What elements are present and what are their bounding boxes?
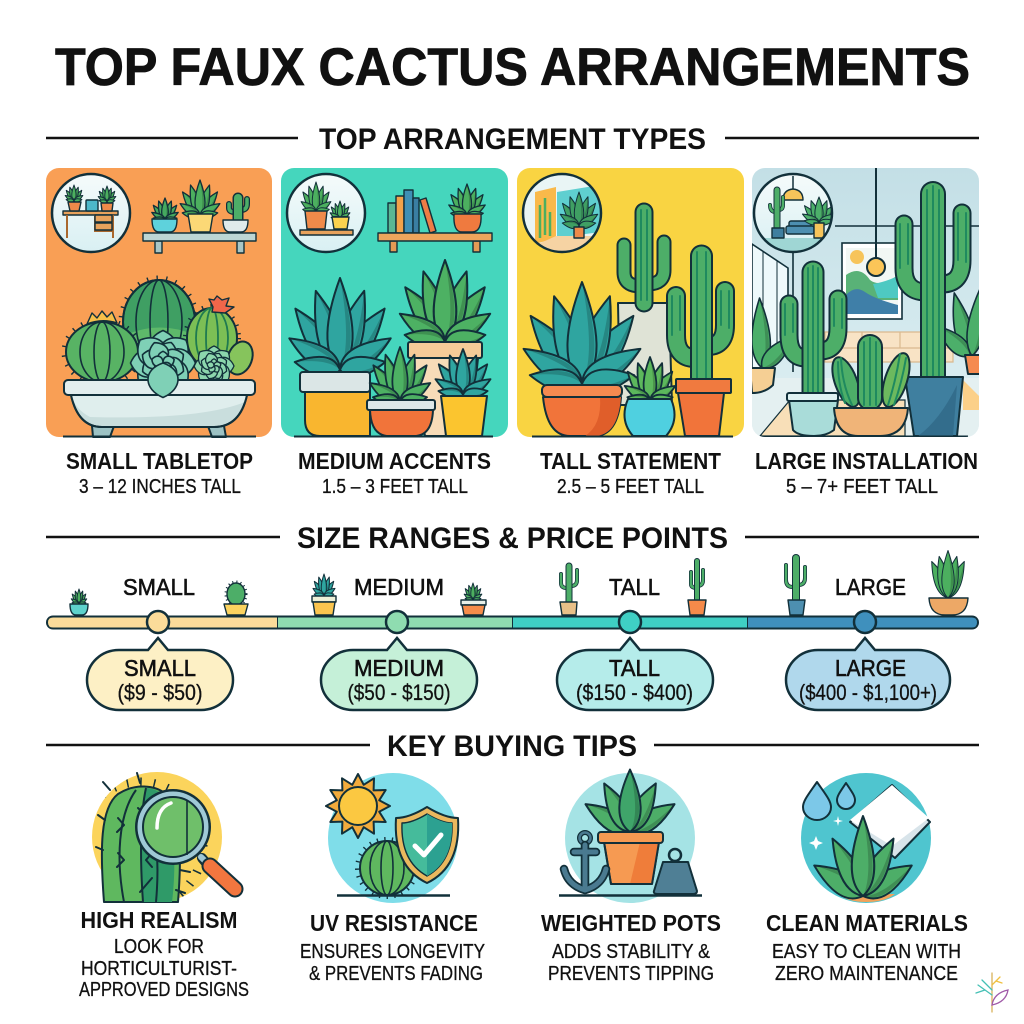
right cactus with terracotta pot	[672, 252, 731, 436]
text: clean materials: ZERO MAINTENANCE	[775, 963, 958, 985]
panel: medium accents	[281, 168, 508, 437]
callout: large price: ($400 - $1,100+)	[799, 680, 937, 705]
captions: arrangement types: LARGE INSTALLATION	[755, 448, 978, 474]
left tall cactus with pale pot	[785, 266, 842, 436]
title: TOP FAUX CACTUS ARRANGEMENTS	[55, 38, 970, 97]
timeline markers	[147, 611, 876, 633]
panel: small tabletop	[46, 168, 272, 437]
callout: tall price: ($150 - $400)	[576, 680, 693, 705]
text: weighted pots: PREVENTS TIPPING	[548, 963, 714, 985]
callout: small price: SMALL	[124, 655, 196, 681]
text: uv resistance: ENSURES LONGEVITY	[300, 941, 485, 963]
inset: living room scene	[754, 174, 837, 258]
tall tan pot and green agave	[395, 260, 495, 436]
inset: desk scene	[52, 174, 130, 252]
icon: water drops, cloth and plant	[801, 773, 931, 905]
small plant in blue pot	[622, 357, 678, 436]
inset: shelf plants	[287, 174, 365, 252]
short cactus trio in tan bowl	[827, 335, 915, 436]
icon: sun, shield and cactus	[326, 773, 458, 903]
callout: medium price: MEDIUM	[354, 655, 444, 681]
callout: large price	[786, 638, 950, 710]
panel background	[281, 168, 508, 437]
captions: arrangement types: 2.5 – 5 FEET TALL	[557, 476, 704, 498]
captions: arrangement types: 3 – 12 INCHES TALL	[79, 476, 241, 498]
inset: room scene	[523, 174, 602, 260]
text: weighted pots: ADDS STABILITY &	[552, 941, 711, 963]
yellow pot and teal agave	[284, 278, 396, 436]
panel background	[752, 168, 979, 437]
orange bowl succulent	[366, 347, 435, 436]
captions: arrangement types: SMALL TABLETOP	[66, 448, 253, 474]
text: uv resistance: UV RESISTANCE	[310, 910, 478, 936]
captions: arrangement types: TALL STATEMENT	[540, 448, 722, 474]
captions: arrangement types: 1.5 – 3 FEET TALL	[322, 476, 468, 498]
callout: large price: LARGE	[835, 655, 906, 681]
callout: small price: ($9 - $50)	[118, 680, 202, 705]
text: high realism: HIGH REALISM	[80, 907, 238, 933]
heading: key buying tips: KEY BUYING TIPS	[387, 730, 637, 763]
icon: corner logo	[976, 973, 1008, 1012]
callout: medium price	[321, 638, 477, 710]
shelf with three plants	[143, 180, 256, 253]
text: weighted pots: WEIGHTED POTS	[541, 910, 721, 936]
cactus cluster	[65, 279, 257, 396]
timeline labels: TALL	[609, 574, 660, 600]
text: uv resistance: & PREVENTS FADING	[309, 963, 483, 985]
back gray pot and cactus	[618, 210, 672, 405]
text: clean materials: CLEAN MATERIALS	[766, 910, 968, 936]
timeline labels: MEDIUM	[354, 574, 444, 600]
timeline: size and price scale	[46, 550, 979, 633]
heading: size ranges and price points: SIZE RANGES & PRICE POINTS	[297, 522, 728, 555]
text: high realism: APPROVED DESIGNS	[79, 979, 249, 1001]
planter tub	[63, 363, 256, 437]
timeline labels	[123, 574, 906, 600]
captions: arrangement types	[66, 448, 978, 498]
text: weighted pots	[541, 910, 721, 985]
text: uv resistance	[300, 910, 485, 985]
callout: medium price: ($50 - $150)	[348, 680, 450, 705]
panel: large installation	[750, 168, 990, 438]
text: clean materials: EASY TO CLEAN WITH	[772, 941, 961, 963]
text: high realism: HORTICULTURIST-	[81, 958, 237, 980]
yellow pot and small teal agave	[432, 349, 494, 436]
text: clean materials	[766, 910, 968, 985]
panel background	[46, 168, 272, 437]
background plant left	[752, 297, 785, 394]
panel: tall statement	[517, 168, 744, 437]
timeline labels: LARGE	[835, 574, 906, 600]
heading: top arrangement types: TOP ARRANGEMENT TYPES	[319, 123, 706, 156]
right huge cactus with blue pot	[900, 186, 966, 436]
panel background	[517, 168, 744, 437]
callout: tall price	[557, 638, 713, 710]
teal agave in orange bowl	[517, 282, 647, 436]
callout: tall price: TALL	[609, 655, 660, 681]
text: high realism: LOOK FOR	[114, 936, 204, 958]
icon: weighted pot with anchor	[559, 770, 702, 903]
timeline labels: SMALL	[123, 574, 195, 600]
room: window, sofa, floor, painting, lamp	[752, 168, 979, 438]
callout: small price	[87, 638, 233, 710]
shelf with books and plant	[378, 184, 492, 252]
mini plants on timeline	[70, 550, 970, 615]
captions: arrangement types: 5 – 7+ FEET TALL	[786, 476, 938, 498]
background plant right	[946, 289, 979, 375]
captions: arrangement types: MEDIUM ACCENTS	[298, 448, 491, 474]
text: high realism	[79, 907, 249, 1001]
icon: cactus under magnifier	[77, 772, 235, 908]
timeline bar	[46, 616, 979, 630]
